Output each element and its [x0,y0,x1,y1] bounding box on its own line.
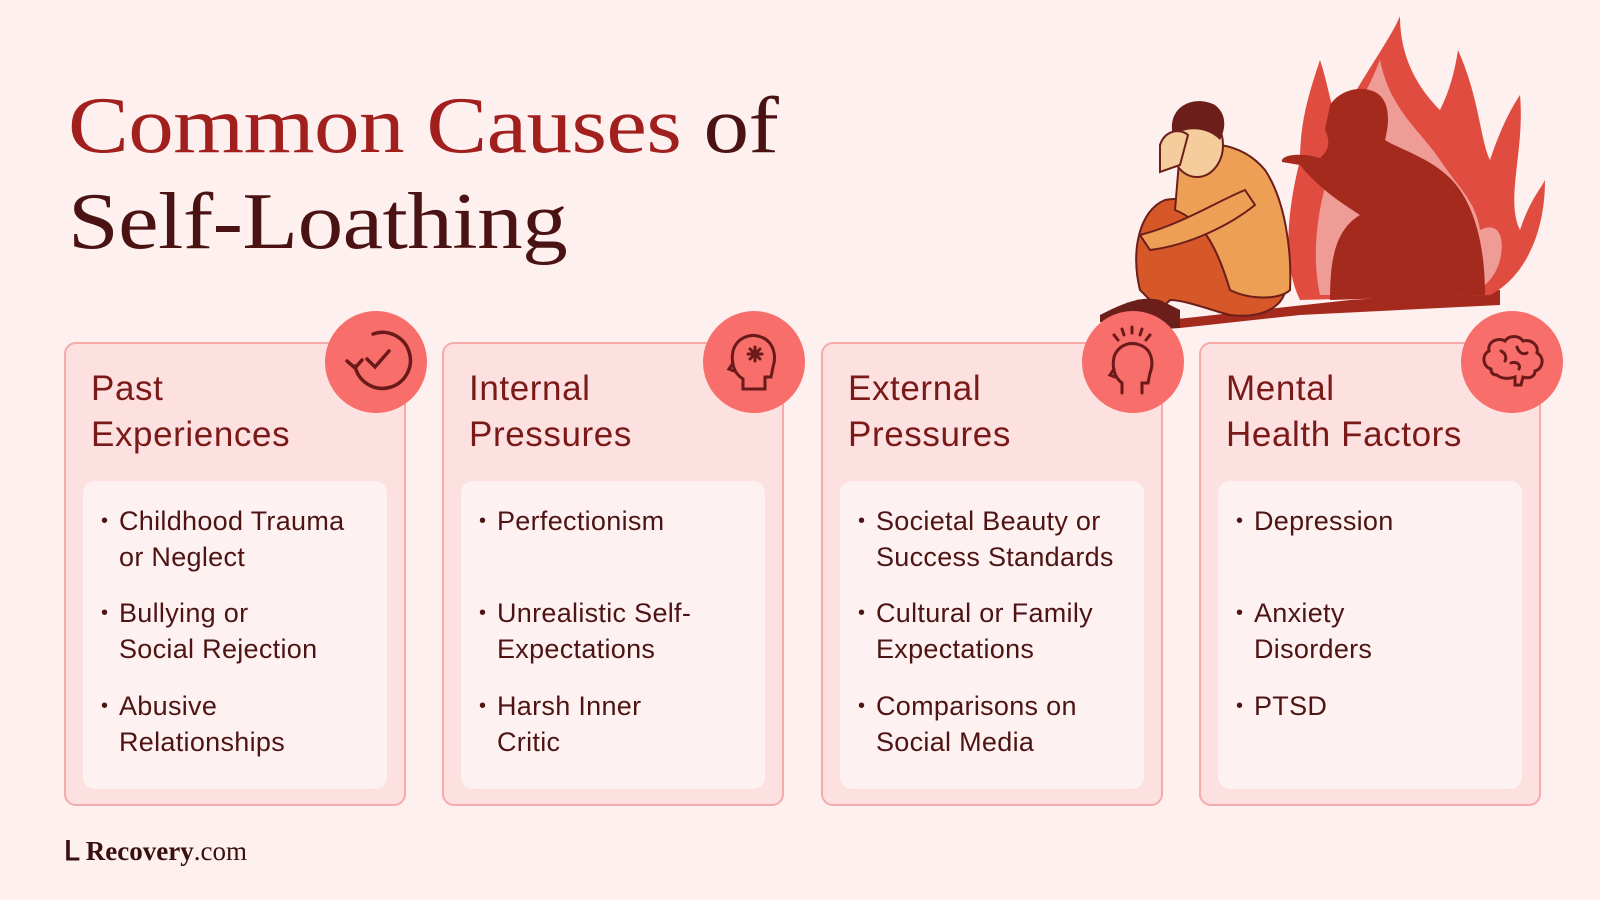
logo: ꓡ Recovery.com [64,836,247,866]
list: Relationships [119,727,285,757]
list: Anxiety [1254,598,1345,628]
heading: Experiences [91,415,290,454]
list: Harsh Inner [497,691,641,721]
icon: brain [1461,311,1563,413]
list: Cultural or Family [876,598,1093,628]
heading: Pressures [848,415,1011,454]
icon: head spark [703,311,805,413]
list [461,481,765,789]
heading [848,369,1011,454]
heading: Pressures [469,415,632,454]
arm [1140,190,1255,250]
title: Common Causes of [68,82,778,170]
person legs [1136,199,1286,316]
panel: past experiences [64,342,406,806]
head [1171,113,1223,177]
list: Social Rejection [119,634,317,664]
illustration: person and fiery shadow [1100,16,1545,329]
list: Social Media [876,727,1034,757]
list: Comparisons on [876,691,1077,721]
list: Perfectionism [497,506,664,536]
heading: External [848,369,981,408]
list [83,481,387,789]
list: PTSD [1254,691,1327,721]
list: Critic [497,727,560,757]
icon: cycle check [325,311,427,413]
heading: Mental [1226,369,1335,408]
list: Abusive [119,691,217,721]
list: Societal Beauty or [876,506,1101,536]
shoes [1100,299,1180,330]
icon: head alert [1082,311,1184,413]
shadow figure [1282,89,1485,300]
heading [469,369,632,454]
heading [91,369,290,454]
title: Self-Loathing [68,178,567,266]
panel: internal pressures [442,342,784,806]
list: Expectations [876,634,1034,664]
panel: mental health factors [1199,342,1541,806]
list: Depression [1254,506,1394,536]
heading: Health Factors [1226,415,1462,454]
flames [1288,16,1545,300]
list: Bullying or [119,598,248,628]
heading [1226,369,1462,454]
list [1218,481,1522,789]
list: Childhood Trauma [119,506,344,536]
shadow band [1150,290,1500,328]
list [840,481,1144,789]
panel: external pressures [821,342,1163,806]
list: Success Standards [876,542,1114,572]
body [1175,144,1290,298]
list: Unrealistic Self- [497,598,691,628]
list: Disorders [1254,634,1372,664]
hand [1160,131,1188,172]
heading: Internal [469,369,591,408]
list: Expectations [497,634,655,664]
list: or Neglect [119,542,245,572]
heading: Past [91,369,163,408]
title [68,82,779,266]
